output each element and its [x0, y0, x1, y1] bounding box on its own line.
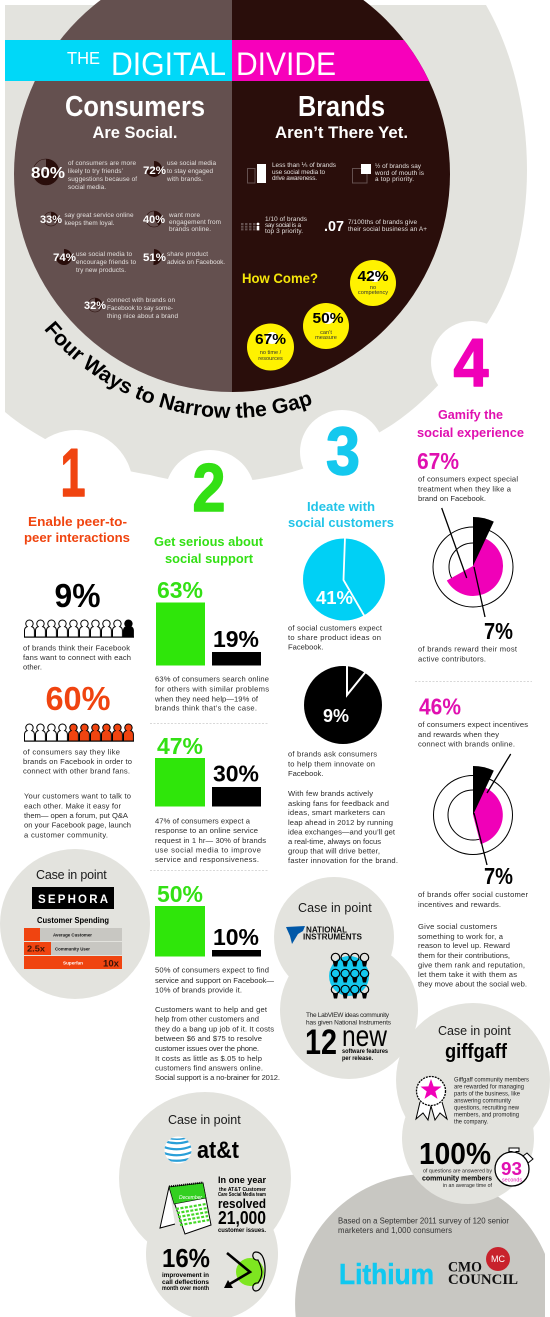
stat: 9%: of brands think their Facebook: [23, 644, 130, 652]
stat: 9%: other.: [23, 662, 42, 672]
text: 47%: use social media to improve: [155, 846, 261, 854]
text: step 1 advice: Your customers want to talk to: [24, 792, 131, 800]
text: labview: The LabVIEW ideas community: [306, 1012, 390, 1019]
text: step 2 advice: Social support is a no-brainer for 2012.: [155, 1073, 280, 1082]
text: step 4 advice: Give social customers: [418, 922, 497, 931]
yellow bubble: 50%: measure: [315, 335, 337, 341]
text: step 1 advice: each other. Make it easy for: [24, 802, 121, 810]
stat: 46%: and rewards when they: [418, 730, 499, 739]
white circle: step 4: [431, 321, 513, 403]
consumer stat: 72%: [143, 160, 216, 183]
logo: sephora: [32, 887, 114, 909]
text: resolved 21,000: customer issues.: [218, 1228, 266, 1234]
consumer stat: 80%: social media.: [68, 184, 106, 191]
logo: cmo council: MC: [491, 1254, 505, 1264]
consumer stat: 72%: to stay engaged: [167, 168, 213, 175]
text: step 4 advice: let them take it with them as: [418, 970, 517, 979]
text: giffgaff members: questions, recruiting new: [454, 1105, 520, 1111]
case: sephora: [0, 849, 150, 999]
heading: brands: [275, 91, 408, 142]
heading: gamify: [417, 407, 524, 440]
text: step 3 advice: group that will drive better,: [288, 846, 380, 856]
step 2: [150, 450, 280, 1082]
text: labview: 12: [305, 1023, 337, 1062]
text: 50%: 10% of brands provide it.: [155, 986, 242, 994]
text: 63%: for others with similar problems: [155, 684, 269, 694]
text: step 2 advice: customers find answers online.: [155, 1064, 263, 1072]
text: resolved 21,000: the AT&T Customer: [219, 1187, 266, 1193]
icon: stopwatch 93 seconds: [495, 1148, 533, 1186]
brand stat: .07: [324, 218, 427, 235]
text: survey: marketers and 1,000 consumers: [338, 1226, 452, 1235]
yellow bubble: 42%: 42%: [358, 268, 388, 285]
chart: 47 vs 30: 47%: [157, 733, 203, 759]
text: step 2 advice: between $6 and $75 to resolve: [155, 1034, 262, 1043]
stat: 16%: call deflections: [162, 1280, 210, 1286]
white circle: step 3: [300, 410, 384, 494]
brand stat: .07: 7/100ths of brands give: [348, 219, 417, 226]
consumer stat: 51%: [143, 249, 225, 266]
text: 41%: to share product ideas on: [288, 633, 381, 642]
stat: 100%: [419, 1136, 492, 1189]
yellow bubble: 42%: competency: [358, 290, 388, 296]
logo: cmo council: COUNCIL: [448, 1272, 518, 1288]
text: 9%: Facebook.: [288, 769, 323, 778]
stat: 67%: treatment when they like a: [418, 484, 512, 494]
heading: social support: social support: [165, 551, 254, 566]
heading: enable peer: Enable peer-to-: [28, 514, 127, 529]
case: giffgaff: Case in point: [438, 1024, 511, 1038]
brand stat: word of mouth: a top priority.: [375, 176, 414, 183]
chart: 50 vs 10: [155, 881, 261, 956]
white circle: step 2: [165, 450, 255, 540]
consumer stat: 80%: likely to try friends’: [68, 168, 124, 175]
logo: sephora: SEPHORA: [38, 894, 108, 906]
chart: 47 vs 30: [155, 733, 261, 806]
text: step 4 advice: they move about the social web.: [418, 980, 527, 988]
stat: 60%: [23, 680, 134, 776]
text: 47%: response to an online service: [155, 826, 258, 835]
stat: 100%: 100%: [419, 1136, 491, 1171]
consumer stat: 51%: advice on Facebook.: [167, 259, 225, 266]
stat: 67%: [417, 448, 518, 503]
consumer stat: 74%: 74%: [53, 252, 76, 264]
text: 50%: service and support on Facebook—: [155, 976, 274, 985]
consumer stat: 32%: 32%: [84, 300, 106, 312]
text: resolved 21,000: Care Social Media team: [218, 1192, 266, 1198]
brand stat: one fifth: drive awareness.: [272, 175, 317, 182]
logo: giffgaff: giffgaff: [445, 1041, 507, 1063]
heading: ideate: social customers: [288, 515, 394, 530]
icon: calendar: [160, 1182, 211, 1234]
text: giffgaff members: members, and promoting: [454, 1112, 519, 1118]
text: step 1 advice: them— open a forum, put Q&A: [24, 811, 129, 820]
icon: stopwatch 93 seconds: seconds: [502, 1178, 523, 1184]
pie: 9%: [304, 664, 382, 744]
stat: 46%: [418, 694, 528, 748]
stat: 9%: [23, 577, 134, 672]
text: step 3 advice: idea exchanges—and you’ll get: [288, 828, 396, 836]
heading: social support: Get serious about: [154, 534, 264, 549]
pie: 41%: 41%: [316, 588, 353, 608]
consumer stat: 32%: Facebook to say some-: [107, 305, 173, 312]
chart: 63 vs 19: 63%: [157, 577, 203, 603]
text: step 2 advice: It costs as little as $.05 to help: [155, 1054, 262, 1063]
logo: national instruments: NATIONAL: [306, 926, 347, 934]
case: sephora: Customer Spending: [37, 916, 109, 925]
consumer stat: 33%: 33%: [40, 214, 62, 226]
consumer stat: 40%: engagement from: [169, 219, 221, 226]
heading: gamify: social experience: [417, 425, 524, 440]
heading: enable peer: [24, 514, 130, 545]
case: at&t: Case in point: [168, 1113, 241, 1127]
heading: gamify: Gamify the: [438, 407, 503, 422]
consumer stat: 80%: of consumers are more: [68, 160, 136, 167]
stat: 60%: 60%: [46, 680, 110, 717]
chart: customer spending: [24, 928, 122, 969]
consumer stat: 51%: 51%: [143, 252, 166, 264]
stat: 7% rewards: active contributors.: [418, 654, 486, 664]
brand stat: dots: say social is a: [265, 222, 301, 229]
consumer stat: 80%: [31, 159, 137, 191]
yellow bubble: 67%: no time /: [260, 350, 282, 356]
text: 63%: when they need help—19% of: [154, 694, 259, 704]
case: national instruments: Case in point: [298, 901, 372, 915]
text: 47%: request in 1 hr— 30% of brands: [155, 836, 266, 845]
stat: 7% incentives: incentives and rewards.: [418, 900, 501, 909]
logo: cmo council: [448, 1247, 518, 1288]
text: step 3 advice: a real-time, always on focus: [288, 837, 381, 846]
text: step 3 advice: ideas, smart marketers can: [288, 808, 385, 817]
heading: brands: Brands: [298, 91, 385, 123]
heading: brands: Aren’t There Yet.: [275, 123, 408, 142]
consumer stat: 40%: brands online.: [169, 226, 211, 233]
heading: ideate: [288, 499, 394, 530]
title banner: DIVIDE: [236, 46, 336, 82]
text: labview: has given National Instruments: [306, 1020, 392, 1026]
text: 41%: [288, 624, 383, 652]
brand stat: dots: top 3 priority.: [265, 228, 303, 235]
case: at&t: [119, 1092, 291, 1317]
step 3: [288, 413, 398, 865]
text: 41%: Facebook.: [288, 642, 323, 652]
text: step 4 advice: them for their contributions,: [418, 951, 510, 960]
consumer stat: 40%: 40%: [143, 214, 165, 226]
text: giffgaff members: the company.: [454, 1119, 488, 1125]
brand stat: .07: .07: [324, 218, 344, 235]
text: 63%: brands think that’s the case.: [155, 704, 257, 712]
chart: 63 vs 19: 19%: [213, 626, 259, 652]
text: step 1 advice: on your Facebook page, launch: [24, 820, 131, 830]
white circle: step 1: [19, 430, 133, 544]
icon: bulb grid: [329, 953, 369, 998]
consumer stat: 32%: connect with brands on: [107, 297, 175, 304]
text: 47%: [155, 816, 266, 864]
step 4: [415, 325, 532, 988]
yellow bubble: 42%: no: [370, 285, 376, 291]
consumer stat: 74%: encourage friends to: [76, 259, 136, 266]
brand stat: .07: their social business an A+: [348, 226, 427, 233]
stat: 9%: fans want to connect with each: [23, 653, 131, 662]
chart: 50 vs 10: 50%: [157, 881, 203, 907]
text: 9%: [288, 750, 377, 778]
background: grey disc: [5, 5, 527, 483]
chart: 50 vs 10: 10%: [213, 924, 259, 950]
text: labview: [305, 1012, 392, 1062]
chart: customer spending: 10x: [103, 958, 119, 968]
stat: 60%: brands on Facebook in order to: [23, 757, 132, 766]
text: step 4 advice: [418, 922, 527, 988]
text: step 2 advice: they do a bang up job of it. It costs: [155, 1024, 274, 1034]
icon: calendar: December: [179, 1195, 202, 1201]
icon: rosette: [416, 1076, 447, 1120]
consumer stat: 80%: 80%: [31, 165, 65, 182]
stat: 46%: 46%: [419, 694, 461, 720]
yellow bubble: 42%: [350, 260, 396, 306]
consumer stat: 40%: [143, 211, 221, 233]
stat: 46%: of consumers expect incentives: [418, 720, 528, 729]
text: step 2 advice: customer issues over the phone.: [155, 1044, 259, 1053]
logo: at&t: at&t: [197, 1137, 239, 1164]
text: step 2 advice: Customers want to help and get: [155, 1005, 268, 1014]
text: giffgaff members: are rewarded for managing: [454, 1084, 524, 1090]
text: step 3 advice: [288, 789, 398, 865]
stat: 16%: month over month: [162, 1286, 209, 1292]
title banner: THE: [67, 48, 100, 68]
logo: at&t: [164, 1136, 239, 1164]
text: resolved 21,000: In one year: [218, 1175, 266, 1186]
title banner: [5, 40, 336, 82]
text: survey: [338, 1217, 509, 1235]
heading: ideate: Ideate with: [307, 499, 375, 514]
text: 63%: [154, 674, 269, 712]
consumer stat: 32%: thing nice about a brand: [107, 313, 178, 320]
text: 47%: 47% of consumers expect a: [155, 816, 251, 826]
yellow bubble: 67%: [247, 324, 294, 370]
chart: 63 vs 19: [156, 577, 261, 666]
logo: national instruments: INSTRUMENTS: [303, 932, 363, 942]
consumer stat: 74%: try new products.: [76, 267, 126, 274]
stat: 16%: [162, 1243, 210, 1292]
case: sephora: Case in point: [36, 868, 107, 882]
panel: footer: [295, 1174, 545, 1317]
number 2: 2: [192, 450, 226, 526]
text: step 4 advice: reason to level up. Reward: [418, 941, 510, 950]
chart: 47 vs 30: 30%: [213, 760, 259, 786]
stat: 67%: brand on Facebook.: [418, 494, 486, 503]
heading: consumers: [65, 91, 205, 142]
case: giffgaff: [396, 1003, 550, 1204]
pie: 9%: 9%: [323, 706, 349, 726]
heading: how come: How Come?: [242, 270, 318, 286]
brand stat: one fifth: [248, 162, 336, 183]
case: national instruments: [274, 877, 418, 1079]
heading: consumers: Consumers: [65, 91, 205, 123]
text: step 1 advice: [24, 792, 131, 840]
chart: target 46 vs 7: [434, 754, 512, 865]
step 1: [23, 435, 134, 840]
brand stat: dots: 1/10 of brands: [265, 216, 307, 223]
text: 50%: 50% of consumers expect to find: [155, 966, 269, 974]
text: giffgaff members: answering community: [454, 1098, 511, 1104]
stat: 7% incentives: [418, 863, 528, 909]
stat: 16%: 16%: [162, 1243, 210, 1273]
icon: stopwatch 93 seconds: 93: [501, 1159, 522, 1179]
stat: 7% incentives: 7%: [484, 863, 513, 889]
curved heading: four ways: Four Ways to Narrow the Gap: [44, 320, 312, 418]
text: giffgaff members: [454, 1077, 529, 1125]
text: labview: new: [342, 1020, 387, 1053]
text: step 3 advice: faster innovation for the brand.: [288, 856, 398, 865]
text: 41%: of social customers expect: [288, 624, 383, 632]
consumer stat: 74%: [53, 249, 136, 274]
consumer stat: 74%: use social media to: [76, 251, 132, 258]
text: 9%: to help them innovate on: [288, 760, 375, 768]
heading: enable peer: peer interactions: [24, 530, 130, 545]
stat: 7% incentives: of brands offer social customer: [418, 890, 528, 899]
brand stat: dots: [241, 216, 307, 235]
text: labview: per release.: [342, 1056, 373, 1062]
consumer stat: 72%: use social media: [167, 160, 216, 167]
text: 63%: 63% of consumers search online: [155, 674, 269, 684]
stat: 60%: connect with other brand fans.: [23, 766, 130, 776]
text: resolved 21,000: 21,000: [218, 1208, 266, 1228]
yellow bubble: 50%: can’t: [320, 330, 332, 336]
logo: cmo council: CMO: [448, 1260, 482, 1276]
stat: 67%: 67%: [417, 448, 459, 474]
stat: 9%: 9%: [54, 577, 100, 614]
consumer stat: 32%: [84, 297, 178, 320]
yellow bubble: 67%: 67%: [255, 331, 286, 348]
chart: customer spending: Community User: [55, 946, 90, 952]
text: step 3 advice: asking fans for feedback and: [288, 799, 389, 808]
text: step 4 advice: give them rank and reputation,: [418, 960, 525, 970]
heading: consumers: Are Social.: [92, 123, 178, 142]
consumer stat: 33%: say great service online: [64, 212, 134, 219]
stat: 100%: of questions are answered by: [423, 1169, 492, 1175]
number 3: 3: [326, 413, 360, 489]
chart: target 67 vs 7: [433, 508, 513, 617]
logo: lithium: Lithium: [339, 1259, 434, 1291]
brand stat: word of mouth: word of mouth is: [374, 170, 424, 177]
consumer stat: 72%: with brands.: [166, 176, 203, 183]
text: step 4 advice: something to work for, a: [418, 932, 504, 941]
text: survey: Based on a September 2011 survey of 120 senior: [338, 1217, 509, 1226]
stat: 7% rewards: of brands reward their most: [418, 644, 518, 654]
text: giffgaff members: Giffgaff community members: [454, 1077, 529, 1083]
text: giffgaff members: parts of the business, like: [454, 1091, 521, 1097]
brand stat: word of mouth: [352, 162, 424, 183]
panel: divided circle: [0, 0, 472, 400]
text: 9%: of brands ask consumers: [288, 750, 377, 758]
stat: 100%: in an average time of: [443, 1183, 492, 1189]
stat: 67%: of consumers expect special: [418, 474, 518, 484]
brand stat: one fifth: Less than ⅕ of brands: [272, 162, 336, 169]
text: step 2 advice: [155, 1005, 280, 1082]
text: resolved 21,000: resolved: [218, 1196, 266, 1211]
pie: 41%: [303, 537, 385, 620]
number 1: 1: [60, 435, 86, 511]
text: step 1 advice: a customer community.: [24, 830, 108, 840]
stat: 46%: connect with brands online.: [418, 740, 515, 748]
logo: national instruments: [286, 926, 363, 944]
stat: 7% rewards: 7%: [484, 618, 513, 644]
text: 47%: service and responsiveness.: [155, 855, 259, 864]
consumer stat: 80%: suggestions because of: [68, 176, 137, 183]
text: step 2 advice: help from other customers and: [155, 1014, 259, 1024]
text: 50%: [155, 966, 274, 994]
brand stat: word of mouth: ½ of brands say: [375, 162, 422, 170]
icon: phone deflection: [224, 1252, 265, 1291]
title banner: DIGITAL: [111, 46, 226, 82]
yellow bubble: 50%: 50%: [312, 310, 344, 327]
consumer stat: 33%: [40, 212, 134, 227]
stat: 60%: of consumers say they like: [23, 748, 120, 756]
text: resolved 21,000: [218, 1175, 266, 1234]
brand stat: one fifth: use social media to: [272, 169, 325, 176]
text: step 3 advice: leap ahead in 2012 by running: [288, 818, 393, 827]
stat: 16%: improvement in: [162, 1273, 209, 1279]
consumer stat: 51%: share product: [167, 251, 208, 258]
heading: social support: [154, 534, 264, 566]
chart: customer spending: Superfan: [63, 960, 83, 966]
consumer stat: 72%: 72%: [143, 165, 166, 177]
yellow bubble: 50%: [303, 303, 349, 349]
consumer stat: 40%: want more: [168, 212, 200, 219]
chart: customer spending: 2.5x: [27, 944, 45, 954]
stat: 100%: community members: [422, 1174, 492, 1183]
number 4: 4: [454, 325, 489, 401]
stat: 7% rewards: [418, 618, 518, 664]
yellow bubble: 67%: resources: [258, 356, 283, 362]
text: labview: software features: [342, 1049, 389, 1055]
text: step 3 advice: With few brands actively: [288, 789, 373, 798]
chart: customer spending: Average Customer: [53, 932, 92, 938]
consumer stat: 33%: keeps them loyal.: [64, 220, 115, 227]
